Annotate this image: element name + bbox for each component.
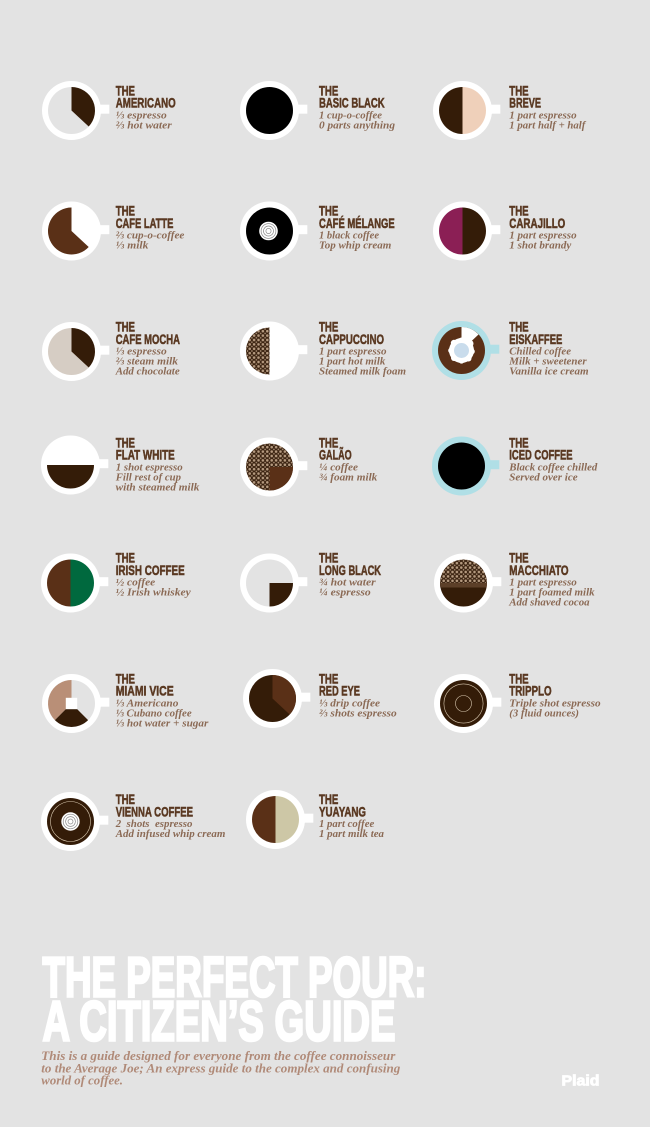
- icon: irish coffee cup: [41, 554, 108, 612]
- text: miami vice: THE: [116, 671, 135, 687]
- text: cafe mocha: CAFE MOCHA: [116, 332, 180, 348]
- text: cappuccino: [319, 320, 406, 378]
- text: basic black: THE: [319, 83, 338, 99]
- text: macchiato: THE: [509, 551, 529, 567]
- text: red eye: THE: [319, 671, 338, 687]
- icon: miami vice cup: [42, 674, 109, 733]
- text: galao: ¼ coffee: [319, 461, 358, 473]
- drink: Cappuccino: [240, 320, 406, 380]
- text: irish coffee: IRISH COFFEE: [116, 563, 185, 579]
- text: long black: ¼ espresso: [319, 587, 371, 599]
- drink: Flat White: [41, 435, 200, 494]
- text: red eye: ⅓ drip coffee: [319, 697, 380, 709]
- text: flat white: [115, 435, 200, 493]
- text: flat white: FLAT WHITE: [116, 448, 175, 464]
- text: cappuccino: 1 part espresso: [319, 346, 387, 358]
- text: cappuccino: 1 part hot milk: [319, 356, 386, 368]
- text: eiskaffee: THE: [509, 320, 529, 336]
- text: yuayang: [319, 792, 384, 840]
- drink: Americano: [42, 81, 176, 140]
- text: breve: BREVE: [509, 96, 541, 112]
- text: eiskaffee: Milk + sweetener: [508, 356, 587, 368]
- text: red eye: ⅔ shots espresso: [319, 707, 397, 719]
- text: iced coffee: [508, 435, 598, 483]
- text: flat white: with steamed milk: [116, 481, 200, 493]
- text: cafe mocha: ⅓ espresso: [116, 346, 167, 358]
- text: cafe latte: [116, 204, 185, 252]
- text: cafe melange: THE: [319, 204, 338, 220]
- text: iced coffee: Served over ice: [509, 471, 578, 483]
- text: breve: [509, 83, 587, 131]
- icon: yuayang cup: [246, 790, 313, 849]
- text: long black: LONG BLACK: [319, 563, 381, 579]
- text: cappuccino: THE: [319, 320, 338, 336]
- text: cafe mocha: ⅔ steam milk: [116, 356, 179, 368]
- drink: Tripplo: [434, 671, 601, 733]
- text: carajillo: THE: [509, 204, 529, 220]
- text: cafe mocha: Add chocolate: [115, 366, 180, 378]
- icon: cappuccino cup: [240, 322, 307, 380]
- icon: americano cup: [42, 81, 109, 140]
- text: vienna coffee: 2 shots espresso: [115, 818, 193, 830]
- drink: Iced Coffee: [432, 435, 598, 496]
- drink: Cafe Latte: [42, 202, 185, 260]
- text: tripplo: TRIPPLO: [509, 684, 552, 700]
- text: macchiato: MACCHIATO: [509, 563, 569, 579]
- text: irish coffee: ½ Irish whiskey: [116, 587, 191, 599]
- drink: Cafe Mocha: [42, 320, 180, 381]
- text: americano: [116, 83, 176, 131]
- icon: long black cup: [240, 554, 307, 612]
- text: cafe latte: ⅓ milk: [116, 240, 149, 252]
- text: galao: [319, 435, 378, 483]
- drink: Cafe Melange: [240, 202, 395, 260]
- description text: [41, 1048, 401, 1088]
- title: A CITIZEN’S GUIDE: [42, 990, 396, 1053]
- text: carajillo: CARAJILLO: [509, 216, 565, 232]
- text: cafe mocha: [115, 320, 180, 378]
- text: yuayang: 1 part coffee: [319, 818, 374, 830]
- description text: to the Average Joe; An express guide to the complex and confusing: [41, 1060, 401, 1075]
- text: red eye: RED EYE: [319, 684, 360, 700]
- icon: flat white cup: [41, 436, 108, 494]
- text: vienna coffee: VIENNA COFFEE: [116, 804, 193, 820]
- text: irish coffee: [116, 551, 191, 599]
- drink: Yuayang: [246, 790, 384, 849]
- description text: world of coffee.: [41, 1073, 123, 1088]
- icon: macchiato cup: [434, 554, 501, 612]
- text: galao: THE: [319, 435, 338, 451]
- text: americano: ⅓ espresso: [116, 109, 167, 121]
- text: iced coffee: ICED COFFEE: [509, 448, 573, 464]
- icon: cafe latte cup: [42, 202, 109, 260]
- text: red eye: [319, 671, 397, 719]
- text: miami vice: [116, 671, 209, 729]
- icon: cafe melange cup: [240, 202, 307, 260]
- text: tripplo: Triple shot espresso: [509, 697, 601, 709]
- icon: vienna coffee cup: [41, 792, 108, 851]
- icon: carajillo cup: [433, 202, 500, 260]
- drink: Galao: [240, 435, 378, 496]
- text: flat white: Fill rest of cup: [115, 471, 181, 483]
- text: cappuccino: Steamed milk foam: [319, 366, 406, 378]
- text: macchiato: 1 part foamed milk: [509, 587, 595, 599]
- text: cafe latte: THE: [116, 204, 135, 220]
- text: flat white: 1 shot espresso: [116, 461, 183, 473]
- icon: eiskaffee cup: [432, 321, 499, 380]
- text: miami vice: ⅓ Americano: [116, 697, 179, 709]
- text: vienna coffee: THE: [116, 792, 135, 808]
- text: iced coffee: Black coffee chilled: [508, 461, 598, 473]
- text: flat white: THE: [116, 435, 135, 451]
- text: long black: ¾ hot water: [319, 577, 376, 589]
- text: tripplo: [509, 671, 601, 719]
- text: basic black: 1 cup-o-coffee: [319, 109, 382, 121]
- text: basic black: [319, 83, 396, 131]
- drink: Eiskaffee: [432, 320, 589, 380]
- text: cappuccino: CAPPUCCINO: [319, 332, 384, 348]
- title: [42, 945, 426, 1053]
- drink: Macchiato: [434, 551, 595, 612]
- text: eiskaffee: [508, 320, 589, 378]
- drink: Basic Black: [240, 81, 396, 140]
- text: long black: [319, 551, 381, 599]
- text: miami vice: ⅓ Cubano coffee: [116, 707, 192, 719]
- text: yuayang: YUAYANG: [319, 804, 366, 820]
- text: yuayang: 1 part milk tea: [319, 828, 384, 840]
- icon: cafe mocha cup: [42, 322, 109, 381]
- text: long black: THE: [319, 551, 338, 567]
- icon: tripplo cup: [434, 674, 501, 733]
- text: eiskaffee: Vanilla ice cream: [509, 366, 589, 378]
- icon: basic black cup: [240, 81, 307, 140]
- text: carajillo: [509, 204, 577, 252]
- text: cafe melange: 1 black coffee: [319, 230, 379, 242]
- text: macchiato: [508, 551, 595, 609]
- text: basic black: BASIC BLACK: [319, 96, 385, 112]
- text: breve: 1 part half + half: [509, 119, 587, 131]
- drink: Carajillo: [433, 202, 577, 260]
- description text: This is a guide designed for everyone from the coffee connoisseur: [41, 1048, 396, 1063]
- text: miami vice: MIAMI VICE: [116, 684, 174, 700]
- text: miami vice: ⅓ hot water + sugar: [116, 717, 209, 729]
- text: iced coffee: THE: [509, 435, 529, 451]
- drink: Irish Coffee: [41, 551, 191, 612]
- text: eiskaffee: Chilled coffee: [509, 346, 571, 358]
- icon: red eye cup: [243, 669, 310, 728]
- drink: Long Black: [240, 551, 381, 612]
- text: carajillo: 1 part espresso: [509, 230, 577, 242]
- text: cafe mocha: THE: [116, 320, 135, 336]
- text: irish coffee: ½ coffee: [116, 577, 155, 589]
- text: eiskaffee: EISKAFFEE: [509, 332, 562, 348]
- drink: Vienna Coffee: [41, 792, 226, 851]
- text: cafe latte: CAFE LATTE: [116, 216, 173, 232]
- text: tripplo: THE: [509, 671, 529, 687]
- text: americano: AMERICANO: [116, 96, 176, 112]
- text: carajillo: 1 shot brandy: [509, 240, 571, 252]
- text: vienna coffee: [115, 792, 226, 840]
- text: breve: THE: [509, 83, 529, 99]
- text: basic black: 0 parts anything: [319, 119, 396, 131]
- text: galao: GALÃO: [319, 446, 352, 464]
- text: yuayang: THE: [319, 792, 338, 808]
- icon: breve cup: [433, 81, 500, 140]
- text: americano: ⅔ hot water: [116, 119, 172, 131]
- title: THE PERFECT POUR:: [42, 945, 426, 1008]
- text: galao: ¾ foam milk: [319, 471, 378, 483]
- logo: Plaid: Plaid: [562, 1074, 600, 1090]
- text: macchiato: Add shaved cocoa: [508, 597, 590, 609]
- text: cafe melange: CAFÉ MÉLANGE: [319, 215, 395, 232]
- text: cafe melange: Top whip cream: [319, 240, 392, 252]
- icon: galao cup: [240, 438, 307, 496]
- drink: Red Eye: [243, 669, 397, 728]
- text: irish coffee: THE: [116, 551, 135, 567]
- text: macchiato: 1 part espresso: [509, 577, 577, 589]
- drink: Breve: [433, 81, 587, 140]
- text: vienna coffee: Add infused whip cream: [115, 828, 226, 840]
- text: americano: THE: [116, 83, 135, 99]
- drink: Miami Vice: [42, 671, 209, 733]
- text: cafe latte: ⅔ cup-o-coffee: [116, 230, 185, 242]
- text: cafe melange: [319, 204, 395, 252]
- icon: iced coffee cup: [432, 436, 499, 496]
- text: breve: 1 part espresso: [509, 109, 577, 121]
- text: tripplo: (3 fluid ounces): [509, 707, 579, 719]
